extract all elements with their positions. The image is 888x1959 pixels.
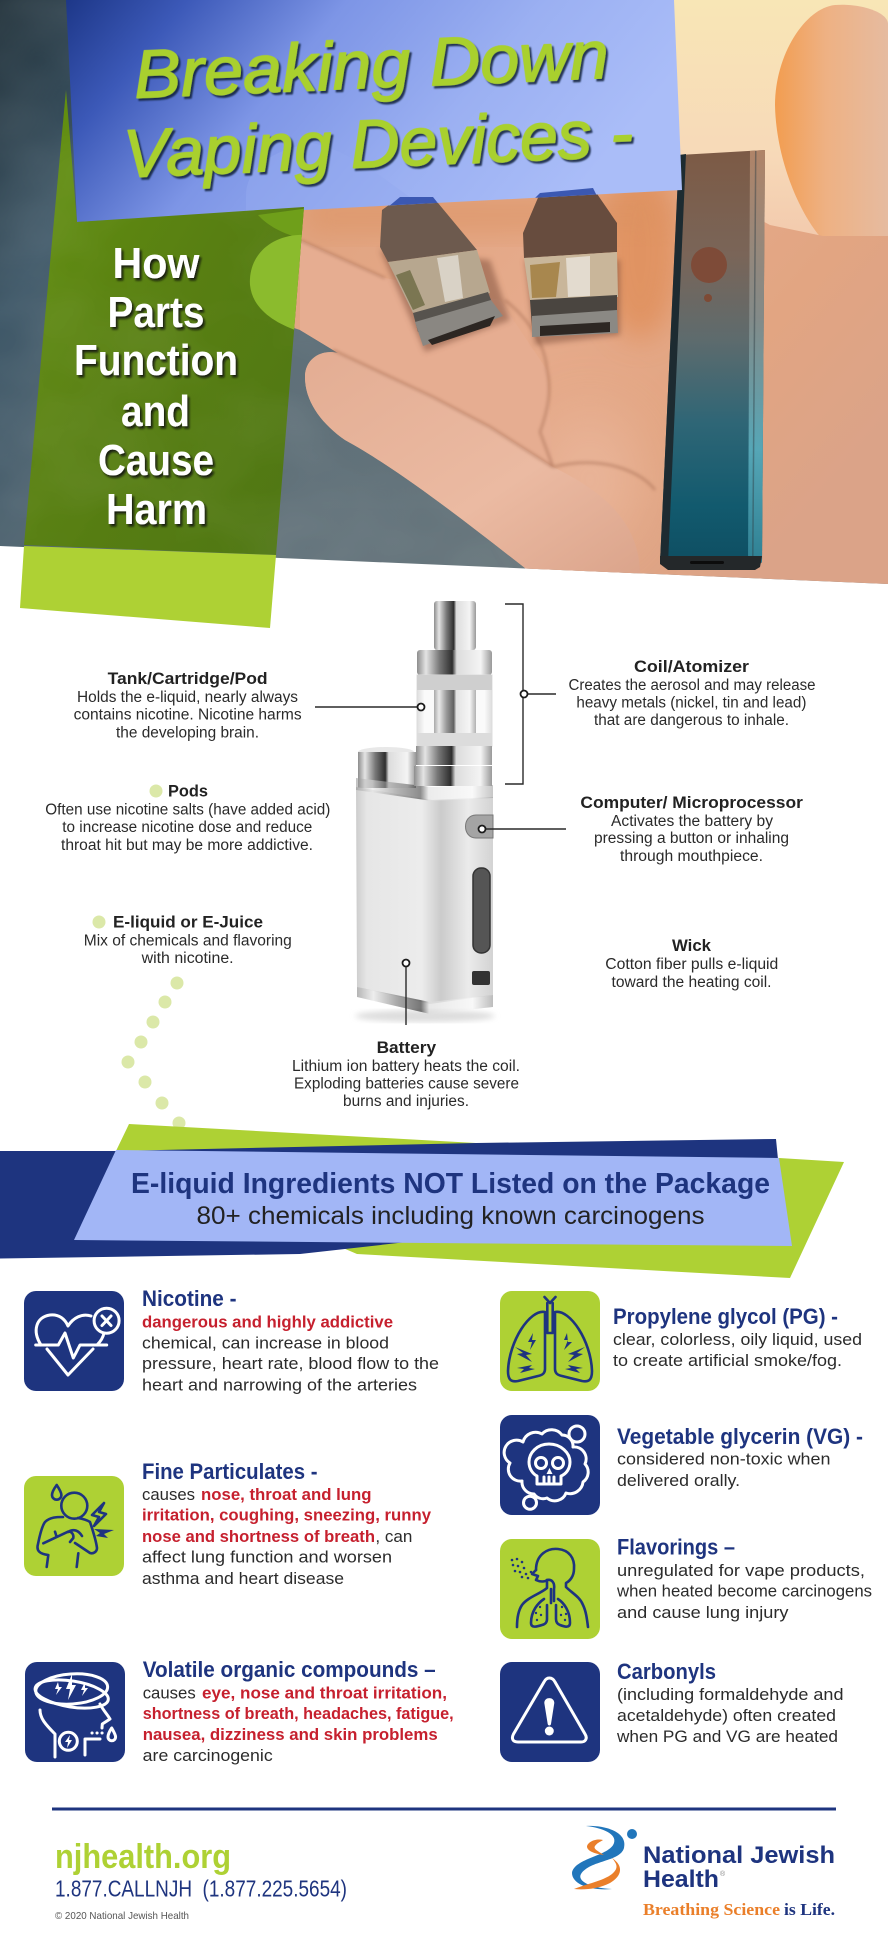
item: Flavorings: when heated become carcinogens (616, 1582, 872, 1601)
item: Nicotine: dangerous and highly addictive (142, 1312, 393, 1331)
mod body (356, 787, 493, 1004)
item: Fine Particulates: nose, throat and lung (201, 1485, 372, 1504)
item: Fine Particulates (24, 1459, 432, 1588)
item: Volatile organic compounds: nausea, dizziness and skin problems (143, 1725, 438, 1744)
item: Flavorings: Flavorings – (617, 1535, 735, 1560)
banner lime shape (116, 1124, 844, 1278)
logo: National Jewish Health: National Jewish (643, 1842, 835, 1869)
side cap (358, 747, 414, 757)
icon: skull cloud (500, 1415, 600, 1515)
top ring (417, 650, 492, 675)
label: Pods: Often use nicotine salts (have added acid) (45, 802, 330, 818)
photo: thumb (775, 4, 888, 236)
item: Fine Particulates: causes (142, 1485, 195, 1504)
logo: National Jewish Health: is Life. (784, 1900, 835, 1919)
photo: warm light by pen (600, 190, 677, 346)
usb port (472, 971, 490, 985)
label: Tank/Cartridge/Pod (74, 669, 302, 741)
label: Battery: Exploding batteries cause severe (294, 1076, 519, 1092)
logo helix (572, 1826, 637, 1889)
logo: National Jewish Health (572, 1826, 835, 1919)
icon: right pod (523, 188, 618, 337)
label: Battery (292, 1038, 520, 1110)
item: Fine Particulates: , can (375, 1527, 412, 1546)
label: Tank/Cartridge/Pod: Holds the e-liquid, nearly always (77, 689, 298, 706)
item: Volatile organic compounds (25, 1657, 454, 1765)
label: Coil/Atomizer (568, 657, 816, 729)
item: Volatile organic compounds: Volatile organic compounds – (143, 1657, 436, 1682)
label: Wick (605, 936, 778, 991)
item: Flavorings: and cause lung injury (617, 1603, 789, 1622)
lime tab under hero (20, 546, 276, 628)
label: E-liquid: with nicotine. (141, 950, 234, 967)
item: Carbonyls: (including formaldehyde and (617, 1685, 844, 1704)
item: Carbonyls (500, 1659, 844, 1762)
icon: vape pen (660, 150, 765, 570)
banner navy shape (0, 1139, 782, 1258)
photo: bright backdrop behind thumb (674, 0, 888, 236)
label: Tank/Cartridge/Pod: the developing brain. (116, 724, 259, 741)
item: Carbonyls: when PG and VG are heated (616, 1727, 838, 1746)
item: Propylene glycol: Propylene glycol (PG) - (613, 1304, 838, 1329)
label: Computer/Microprocessor: through mouthpiece. (620, 848, 763, 865)
label: Wick: Wick (672, 936, 712, 955)
item: Flavorings: unregulated for vape products, (617, 1561, 865, 1580)
item: Propylene glycol: clear, colorless, oily liquid, used (613, 1330, 862, 1349)
photo: lower finger (305, 352, 640, 575)
label: Coil/Atomizer: that are dangerous to inhale. (594, 712, 789, 729)
green panel smoke texture (33, 150, 304, 555)
footer contact (55, 1838, 347, 1922)
subtitle: How (112, 239, 200, 288)
label: Pods: throat hit but may be more addictive. (61, 837, 313, 854)
subtitle: Cause (98, 436, 214, 485)
footer contact: © 2020 National Jewish Health (55, 1910, 189, 1922)
item: Vegetable glycerin: delivered orally. (617, 1471, 740, 1490)
photo: middle finger (300, 241, 508, 434)
photo: smoke texture (0, 0, 304, 542)
footer contact: njhealth.org (55, 1838, 231, 1876)
label: Coil/Atomizer: Coil/Atomizer (634, 657, 749, 676)
label: Wick: Cotton fiber pulls e-liquid (605, 956, 778, 973)
icon: pen button (691, 247, 727, 283)
icon: person in pain (24, 1476, 124, 1576)
item: Vegetable glycerin: Vegetable glycerin (VG) - (617, 1424, 863, 1449)
item: Nicotine: pressure, heart rate, blood flow to the (142, 1354, 439, 1373)
item: Volatile organic compounds: eye, nose and throat irritation, (202, 1684, 447, 1702)
title (118, 16, 634, 192)
logo: National Jewish Health: Health (643, 1866, 719, 1893)
icon: heart (24, 1291, 124, 1391)
blue overlay panel (66, 0, 682, 222)
icon: head with headache (25, 1662, 125, 1762)
label: E-liquid: Mix of chemicals and flavoring (84, 932, 292, 950)
device shadow (355, 1010, 495, 1022)
item: Propylene glycol (500, 1291, 862, 1391)
label: Battery: Lithium ion battery heats the coil. (292, 1058, 520, 1075)
item: Fine Particulates: asthma and heart disease (142, 1569, 344, 1588)
item: Fine Particulates: nose and shortness of breath (142, 1527, 375, 1546)
subtitle: Harm (106, 485, 207, 534)
banner: e-liquid ingredients (0, 1124, 844, 1278)
label: Pods (45, 782, 330, 854)
photo: hand palm (285, 172, 888, 590)
item: Vegetable glycerin (500, 1415, 863, 1515)
green overlay panel (24, 90, 304, 555)
subtitle: Function (74, 336, 238, 385)
footer contact: 1.877.CALLNJH (1.877.225.5654) (55, 1876, 347, 1902)
icon: inhaling person (500, 1539, 600, 1639)
label: E-liquid: E-liquid or E-Juice (113, 912, 263, 932)
photo: pod shadow (380, 250, 620, 352)
subtitle (74, 239, 238, 534)
label: Coil/Atomizer: Creates the aerosol and may release (568, 677, 816, 694)
title: Breaking Down (132, 17, 610, 113)
logo: National Jewish Health: ® (720, 1870, 726, 1878)
finger seen through blue panel (306, 188, 596, 210)
item: Carbonyls: Carbonyls (617, 1659, 716, 1684)
item: Volatile organic compounds: shortness of breath, headaches, fatigue, (143, 1704, 454, 1723)
battery window (473, 868, 490, 953)
item: Nicotine (24, 1286, 439, 1394)
vape mod device illustration (355, 601, 495, 1022)
label: Pods: Pods (168, 782, 208, 801)
photo: palm highlight (552, 415, 644, 528)
item: Volatile organic compounds: are carcinogenic (143, 1746, 273, 1765)
label: Battery: Battery (377, 1038, 437, 1057)
label: Wick: toward the heating coil. (612, 974, 772, 991)
item: Propylene glycol: to create artificial smoke/fog. (613, 1351, 842, 1370)
photo: warm band under blue panel (304, 195, 664, 235)
drip tip (434, 601, 476, 650)
label: Battery: burns and injuries. (343, 1093, 469, 1110)
lower rings (416, 746, 492, 765)
item: Carbonyls: acetaldehyde) often created (617, 1706, 836, 1725)
photo: finger creases (300, 240, 655, 490)
glass tank (417, 675, 492, 746)
subtitle: and (121, 387, 190, 436)
icon: warning triangle (500, 1662, 600, 1762)
item: Nicotine: Nicotine - (142, 1286, 236, 1311)
title: Vaping Devices - (122, 95, 634, 192)
banner blue shape (74, 1150, 792, 1246)
logo: National Jewish Health: Breathing Science (643, 1900, 780, 1919)
banner heading: E-liquid Ingredients NOT Listed on the Package (131, 1168, 770, 1200)
fingertips through green panel (258, 208, 304, 238)
hero photo panel (0, 0, 888, 590)
top rim (356, 778, 493, 801)
icon: left pod (380, 197, 503, 346)
bottom rim (357, 987, 493, 1014)
subtitle: Parts (108, 288, 204, 337)
item: Fine Particulates: affect lung function and worsen (142, 1548, 392, 1567)
banner subheading: 80+ chemicals including known carcinogens (196, 1202, 704, 1230)
label: Pods: to increase nicotine dose and reduce (62, 819, 312, 836)
item: Vegetable glycerin: considered non-toxic when (617, 1450, 830, 1469)
icon: lungs (500, 1291, 600, 1391)
label: Computer/Microprocessor: Activates the battery by (611, 813, 773, 830)
callout lines (315, 604, 566, 1025)
label: E-liquid (84, 912, 292, 967)
item: Flavorings (500, 1535, 872, 1639)
label: Computer/Microprocessor (580, 793, 803, 865)
label: Computer/Microprocessor: pressing a button or inhaling (594, 830, 789, 847)
photo: grey smoke background (0, 0, 888, 590)
label: Coil/Atomizer: heavy metals (nickel, tin and lead) (576, 694, 806, 711)
item: Volatile organic compounds: causes (143, 1684, 196, 1702)
label: Tank/Cartridge/Pod: contains nicotine. Nicotine harms (74, 706, 302, 724)
item: Nicotine: heart and narrowing of the arteries (142, 1376, 417, 1394)
item: Fine Particulates: irritation, coughing, sneezing, runny (142, 1506, 432, 1525)
item: Fine Particulates: Fine Particulates - (142, 1459, 318, 1484)
dotted path from e-liquid to banner (122, 976, 186, 1130)
label: Computer/Microprocessor: Computer/ Microprocessor (580, 793, 803, 812)
label: Tank/Cartridge/Pod: Tank/Cartridge/Pod (108, 669, 268, 688)
item: Nicotine: chemical, can increase in blood (142, 1334, 389, 1352)
fire button (466, 815, 493, 838)
